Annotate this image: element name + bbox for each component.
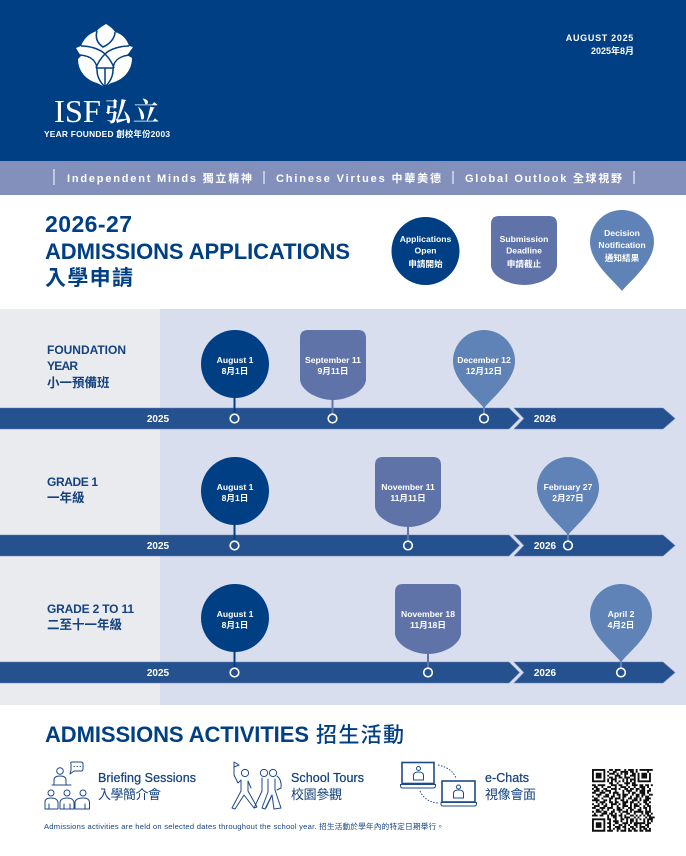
legend: decision notification (590, 210, 654, 291)
motto band (0, 161, 686, 195)
date (566, 33, 634, 56)
timeline background (0, 309, 686, 705)
pin: november 11 (375, 457, 441, 550)
pin: april 2: 4月2日 (608, 620, 634, 630)
activities heading: ADMISSIONS ACTIVITIES (45, 722, 309, 747)
row label: 小一預備班 (47, 375, 110, 390)
title: ADMISSIONS APPLICATIONS (45, 239, 350, 264)
pin: february 27: February 27 (544, 482, 593, 492)
legend: submission deadline (491, 216, 557, 285)
pin: april 2 (590, 584, 652, 677)
timeline bar (0, 662, 675, 683)
label: e-chats: 視像會面 (485, 787, 537, 802)
icon: e-chats (400, 762, 476, 806)
pin: august 1 (201, 330, 269, 423)
timeline bar: 2026 (534, 414, 557, 425)
pin: november 11: November 11 (381, 482, 435, 492)
pin: november 18 (395, 584, 461, 677)
year founded: YEAR FOUNDED 創校年份2003 (44, 129, 170, 139)
row label: YEAR (47, 359, 78, 373)
timeline bar (0, 535, 675, 556)
row: grade 2 to 11 (0, 584, 675, 683)
logo wordmark: ISF (54, 93, 101, 129)
pin: august 1: 8月1日 (222, 366, 248, 376)
row label: GRADE 1 (47, 475, 98, 489)
pin: november 18: November 18 (401, 609, 455, 619)
date: 2025年8月 (591, 45, 634, 56)
pin: april 2: April 2 (608, 609, 635, 619)
legend: decision notification: 通知結果 (605, 252, 640, 263)
motto band: Independent Minds 獨立精神 (67, 171, 252, 185)
row label: 一年級 (47, 490, 85, 505)
logo wordmark (54, 93, 159, 129)
legend: applications open (392, 217, 460, 285)
icon: ISF lotus logo (76, 24, 133, 87)
title: 入學申請 (45, 267, 133, 290)
legend: decision notification: Decision (604, 228, 640, 238)
pin: august 1 (201, 457, 269, 550)
timeline bar: 2026 (534, 541, 557, 552)
pin: august 1: 8月1日 (222, 493, 248, 503)
timeline bar: 2025 (147, 668, 170, 679)
row label: 二至十一年級 (47, 617, 123, 632)
pin: december 12: December 12 (457, 355, 511, 365)
date: AUGUST 2025 (566, 33, 634, 43)
label: briefing sessions: 入學簡介會 (98, 787, 162, 802)
row: foundation year (0, 330, 675, 429)
row label (47, 602, 134, 632)
footnote: Admissions activities are held on selected dates throughout the school year. 招生活動於學年內的特定日期舉行。 (44, 821, 444, 831)
legend: applications open: Applications (400, 234, 451, 244)
pin: september 11: September 11 (305, 355, 361, 365)
legend: submission deadline: Submission (500, 234, 548, 244)
legend: submission deadline: 申請截止 (507, 258, 542, 269)
label: school tours: 校園參觀 (291, 787, 343, 802)
timeline bar: 2025 (147, 541, 170, 552)
label: e-chats (485, 771, 537, 802)
pin: february 27: 2月27日 (552, 493, 584, 503)
label: e-chats: e-Chats (485, 771, 529, 785)
label: school tours: School Tours (291, 771, 364, 785)
label: briefing sessions (98, 771, 196, 802)
motto band: Chinese Virtues 中華美德 (276, 171, 441, 185)
timeline bar (0, 408, 675, 429)
label: briefing sessions: Briefing Sessions (98, 771, 196, 785)
header panel (0, 0, 686, 161)
pin: september 11 (300, 330, 366, 423)
pin: december 12: 12月12日 (466, 366, 502, 376)
row label (47, 475, 98, 505)
title: 2026-27 (45, 211, 132, 237)
pin: august 1: August 1 (217, 355, 254, 365)
logo wordmark: 弘立 (105, 98, 159, 127)
pin: december 12 (453, 330, 515, 423)
legend: applications open: 申請開始 (408, 258, 443, 269)
row label: GRADE 2 TO 11 (47, 602, 134, 616)
pin: august 1: August 1 (217, 482, 254, 492)
title (45, 211, 350, 290)
label: school tours (291, 771, 364, 802)
timeline bar: 2026 (534, 668, 557, 679)
row label: FOUNDATION (47, 343, 126, 357)
icon: briefing sessions (45, 762, 90, 809)
pin: november 11: 11月11日 (390, 493, 426, 503)
legend: decision notification: Notification (598, 240, 646, 250)
QR code (592, 769, 655, 832)
legend: submission deadline: Deadline (506, 246, 542, 256)
motto band: Global Outlook 全球視野 (465, 171, 622, 185)
activities heading: 招生活動 (316, 724, 404, 747)
icon: school tours (232, 762, 281, 809)
pin: november 18: 11月18日 (410, 620, 446, 630)
pin: august 1: 8月1日 (222, 620, 248, 630)
row label (47, 343, 126, 390)
pin: february 27 (537, 457, 599, 550)
pin: september 11: 9月11日 (317, 366, 349, 376)
timeline bar: 2025 (147, 414, 170, 425)
pin: august 1 (201, 584, 269, 677)
legend: applications open: Open (415, 246, 436, 256)
row: grade 1 (0, 457, 675, 556)
pin: august 1: August 1 (217, 609, 254, 619)
